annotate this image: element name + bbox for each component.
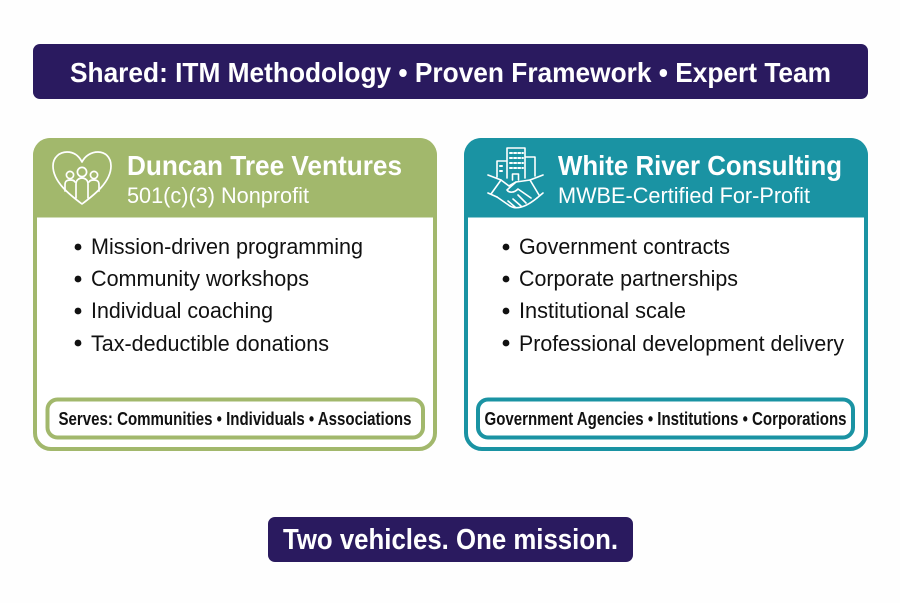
- subheading: MWBE-Certified For-Profit: MWBE-Certified For-Profit: [558, 183, 810, 208]
- subheading: 501(c)(3) Nonprofit: 501(c)(3) Nonprofit: [127, 183, 309, 208]
- bullet list: Duncan Tree Ventures: Individual coaching: [91, 298, 273, 323]
- bullet list: Duncan Tree Ventures: Mission-driven programming: [91, 234, 363, 259]
- panel: Duncan Tree Ventures: [33, 138, 437, 449]
- top banner: shared foundation: Shared: ITM Methodology • Proven Framework • Expert Team: [70, 57, 831, 88]
- bullet list: Duncan Tree Ventures: Community workshops: [91, 266, 309, 291]
- bullet list: White River Consulting: Institutional scale: [519, 298, 686, 323]
- bullet list: White River Consulting: Corporate partnerships: [519, 266, 738, 291]
- heading: Duncan Tree Ventures: Duncan Tree Ventures: [127, 150, 402, 181]
- panel: White River Consulting: [464, 138, 868, 449]
- closing banner: tagline: [268, 517, 633, 562]
- icon: heart with people: [53, 152, 111, 204]
- callout: who White River Consulting serves: [478, 400, 853, 438]
- closing banner: tagline: Two vehicles. One mission.: [283, 524, 618, 556]
- callout: who Duncan Tree Ventures serves: Serves: Communities • Individuals • Associations: [58, 409, 412, 429]
- top banner: shared foundation: [33, 44, 868, 99]
- bullet list: Duncan Tree Ventures: Tax-deductible donations: [91, 331, 329, 356]
- callout: who Duncan Tree Ventures serves: [48, 400, 423, 438]
- panel header: Duncan Tree Ventures: [33, 138, 437, 218]
- bullet list: White River Consulting: Professional development delivery: [519, 331, 845, 356]
- icon: buildings and handshake: [488, 148, 543, 208]
- bullet list: Duncan Tree Ventures: [75, 234, 363, 356]
- bullet list: White River Consulting: Government contracts: [519, 234, 730, 259]
- panel header: White River Consulting: [464, 138, 868, 218]
- heading: White River Consulting: White River Consulting: [558, 150, 842, 181]
- bullet list: White River Consulting: [503, 234, 845, 356]
